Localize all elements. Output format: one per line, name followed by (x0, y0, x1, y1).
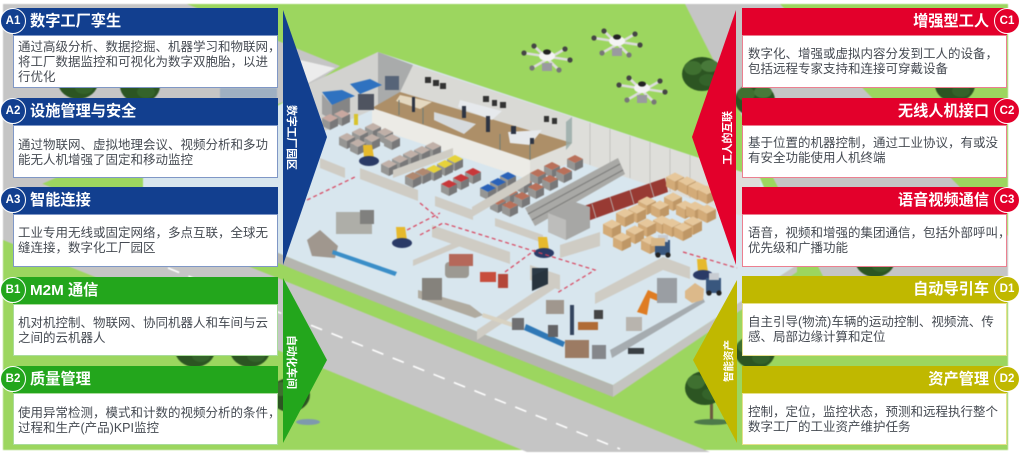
road: bottom (3, 168, 710, 452)
back walls (300, 52, 760, 222)
panel: D1 (742, 276, 1019, 356)
heading D2: 资产管理 (928, 371, 989, 388)
text A1 (13, 35, 278, 88)
text C3 (742, 214, 1007, 267)
arrow: automated workshop: 自动化车间 (285, 335, 299, 389)
text A3: 工业专用无线或固定网络，多点互联，全球无 (18, 226, 268, 240)
badge D1 (994, 276, 1020, 302)
heading B2: 质量管理 (30, 371, 91, 388)
heading A3 (13, 187, 278, 214)
text B2: 使用异常检测，模式和计数的视频分析的条件， (18, 406, 281, 420)
big machines (307, 201, 590, 288)
drones (521, 28, 668, 105)
badge A3: A3 (6, 194, 20, 206)
arrow: digital factory park: 数字工厂园区 (285, 105, 299, 170)
text B2 (13, 393, 278, 445)
panel: A3 (1, 187, 278, 267)
text A2: 通过物联网、虚拟地理会议、视频分析和多功 (18, 138, 268, 152)
panel: C1 (742, 8, 1019, 88)
heading C3 (742, 187, 1007, 214)
blue machines (322, 76, 399, 125)
heading D2 (742, 366, 1007, 393)
badge A3 (0, 187, 26, 213)
badge C2: C2 (1000, 105, 1014, 117)
badge A2 (0, 98, 26, 124)
panel: B2 (1, 366, 281, 445)
text D1: 感、局部边缘计算和定位 (748, 330, 886, 344)
badge A2: A2 (6, 105, 20, 117)
arrow: connected workers: 工人的互联 (720, 111, 734, 165)
text A1: 行优化 (18, 70, 56, 84)
heading A1 (13, 8, 278, 35)
badge D1: D1 (1000, 283, 1014, 295)
mezzanine office (372, 65, 572, 180)
panel: B1 (1, 277, 278, 356)
heading A2: 设施管理与安全 (30, 103, 136, 120)
heading A3: 智能连接 (30, 192, 91, 209)
road: top left (3, 4, 340, 200)
trees (58, 57, 975, 425)
AGVs and forklifts (359, 145, 722, 296)
road dashes (168, 268, 620, 449)
badge A1 (0, 8, 26, 34)
badge B2 (0, 366, 26, 392)
arrow: smart assets: 智能资产 (722, 340, 735, 382)
heading D1 (742, 276, 1007, 303)
badge C1 (994, 8, 1020, 34)
badge C3: C3 (1000, 194, 1014, 206)
text A1: 通过高级分析、数据挖掘、机器学习和物联网， (18, 40, 281, 54)
panel: D2 (742, 366, 1019, 445)
badge D2 (994, 366, 1020, 392)
badge B1 (0, 277, 26, 303)
text B1: 机对机控制、物联网、协同机器人和车间与云 (18, 316, 268, 330)
dark sign board (532, 269, 548, 291)
text A3: 缝连接，数字化工厂园区 (18, 241, 156, 255)
text C2 (742, 125, 1007, 178)
text D1 (742, 303, 1007, 356)
partition walls (320, 148, 690, 340)
production lines (332, 250, 705, 359)
factory floor (143, 52, 797, 397)
arrow: connected workers (692, 10, 736, 265)
text A2: 能无人机增强了固定和移动监控 (18, 153, 193, 167)
text C1 (742, 35, 1007, 88)
text B1: 之间的云机器人 (18, 331, 106, 345)
text A2 (13, 125, 278, 178)
text D1: 自主引导(物流)车辆的运动控制、视频流、传 (748, 315, 994, 329)
text C3: 语音，视频和增强的集团通信，包括外部呼叫， (748, 226, 1011, 240)
heading B2 (13, 366, 278, 393)
heading C2 (742, 98, 1007, 125)
cardboard crates (603, 172, 716, 254)
heading B1 (13, 277, 278, 304)
heading B1: M2M 通信 (30, 282, 98, 299)
badge A1: A1 (6, 15, 20, 27)
text A1: 将工厂数据监控和可视化为数字双胞胎，以进 (18, 55, 268, 69)
shelving racks (525, 158, 668, 226)
road: top right (685, 4, 1008, 290)
text D2 (742, 393, 1007, 445)
bin groups (322, 110, 583, 217)
panel: C3 (742, 187, 1019, 267)
heading D1: 自动导引车 (913, 281, 989, 298)
arrow: automated workshop (283, 278, 327, 443)
panel: C2 (742, 98, 1019, 178)
dashed routes (307, 177, 737, 293)
text C2: 有安全功能使用人机终端 (748, 151, 886, 165)
panel: A2 (1, 98, 278, 178)
arrow: smart assets (693, 280, 737, 443)
heading C1: 增强型工人 (913, 13, 989, 30)
text D2: 控制，定位，监控状态，预测和远程执行整个 (748, 405, 998, 419)
text B2: 过程和生产(产品)KPI监控 (18, 421, 159, 435)
text A3 (13, 214, 278, 267)
text D2: 数字工厂的工业资产维护任务 (748, 420, 911, 434)
text C1: 数字化、增强或虚拟内容分发到工人的设备， (748, 47, 998, 61)
heading C2: 无线人机接口 (898, 103, 989, 120)
text C3: 优先级和广播功能 (748, 241, 848, 255)
text C2: 基于位置的机器控制，通过工业协议，有或没 (748, 136, 998, 150)
text B1 (13, 304, 278, 356)
heading C3: 语音视频通信 (898, 192, 989, 209)
text C1: 包括远程专家支持和连接可穿戴设备 (748, 62, 948, 76)
badge C1: C1 (1000, 15, 1014, 27)
heading C1 (742, 8, 1007, 35)
badge C3 (994, 187, 1020, 213)
panel: A1 (1, 8, 281, 88)
badge B1: B1 (6, 284, 20, 296)
badge D2: D2 (1000, 373, 1014, 385)
heading A1: 数字工厂孪生 (30, 13, 121, 30)
heading A2 (13, 98, 278, 125)
badge B2: B2 (6, 373, 20, 385)
badge C2 (994, 98, 1020, 124)
arrow: digital factory park (283, 10, 327, 265)
